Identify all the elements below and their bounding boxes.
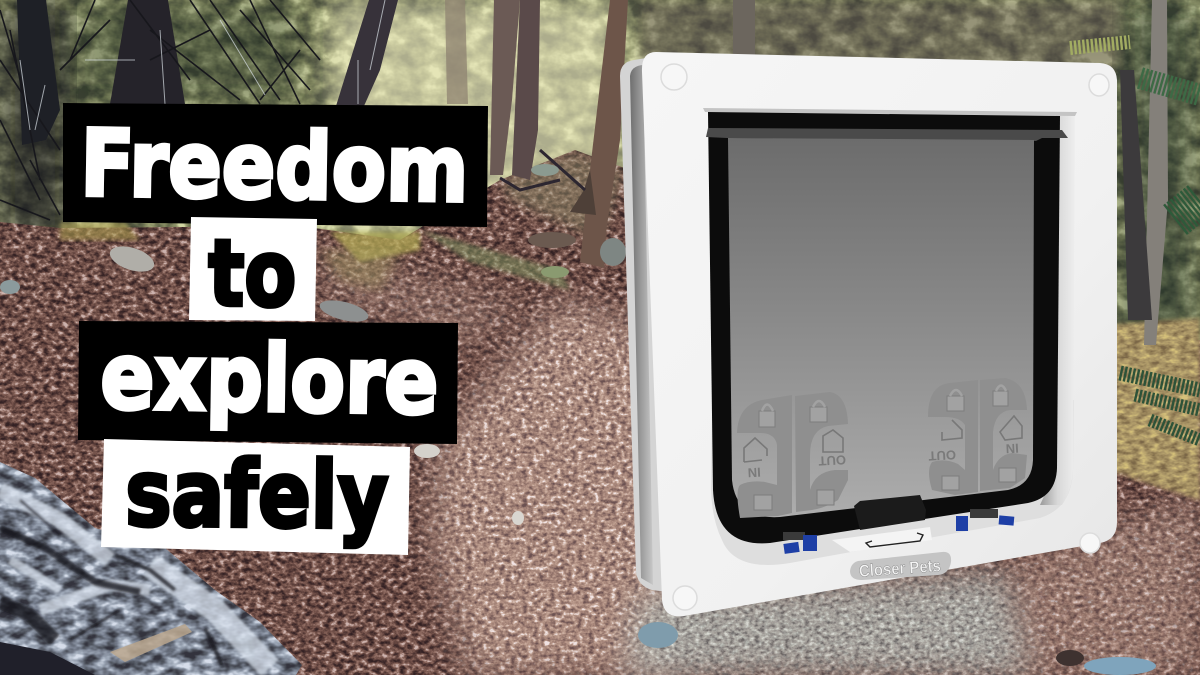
headline label: safely: safely	[125, 440, 389, 550]
headline label: Freedom: Freedom	[80, 110, 469, 223]
gravel path	[600, 560, 1050, 675]
corner screw covers	[661, 64, 1109, 610]
white slider	[832, 527, 932, 552]
flap latch	[854, 495, 926, 530]
forest backdrop	[0, 0, 1200, 345]
translucent flap	[728, 138, 1034, 517]
fallen log	[0, 455, 305, 675]
dry grass bank	[1117, 316, 1200, 501]
door rear housing	[620, 57, 668, 592]
IN / OUT labels	[747, 441, 1019, 480]
mode icon panels	[737, 378, 1027, 518]
opening top edge	[703, 108, 1077, 116]
house arrow icons	[744, 416, 1022, 462]
headline	[63, 103, 488, 555]
headline label: to: to	[208, 220, 297, 328]
IN / OUT labels: IN	[1005, 441, 1019, 456]
door white frame	[642, 52, 1117, 616]
headline label: explore: explore	[100, 323, 439, 435]
product: cat flap door	[620, 52, 1117, 616]
black flap surround	[708, 112, 1060, 543]
slider slot	[866, 533, 923, 547]
rocks	[0, 164, 1156, 675]
dark clip backing	[783, 509, 998, 540]
blue lock clips	[783, 515, 1014, 554]
frame inner recess	[711, 400, 1074, 565]
bare branches	[0, 0, 585, 220]
top hinge bar	[706, 128, 1068, 141]
pale branch highlights	[20, 0, 385, 130]
brand badge: Closer Pets	[858, 556, 941, 581]
pine branches	[1070, 42, 1200, 440]
lock glyphs	[754, 391, 1016, 510]
ground: forest litter	[0, 140, 1200, 675]
IN / OUT labels: IN	[747, 465, 761, 480]
right bevel	[1040, 114, 1075, 505]
IN / OUT labels: OUT	[818, 452, 846, 469]
tree trunks	[17, 0, 1168, 345]
IN / OUT labels: OUT	[928, 447, 956, 464]
